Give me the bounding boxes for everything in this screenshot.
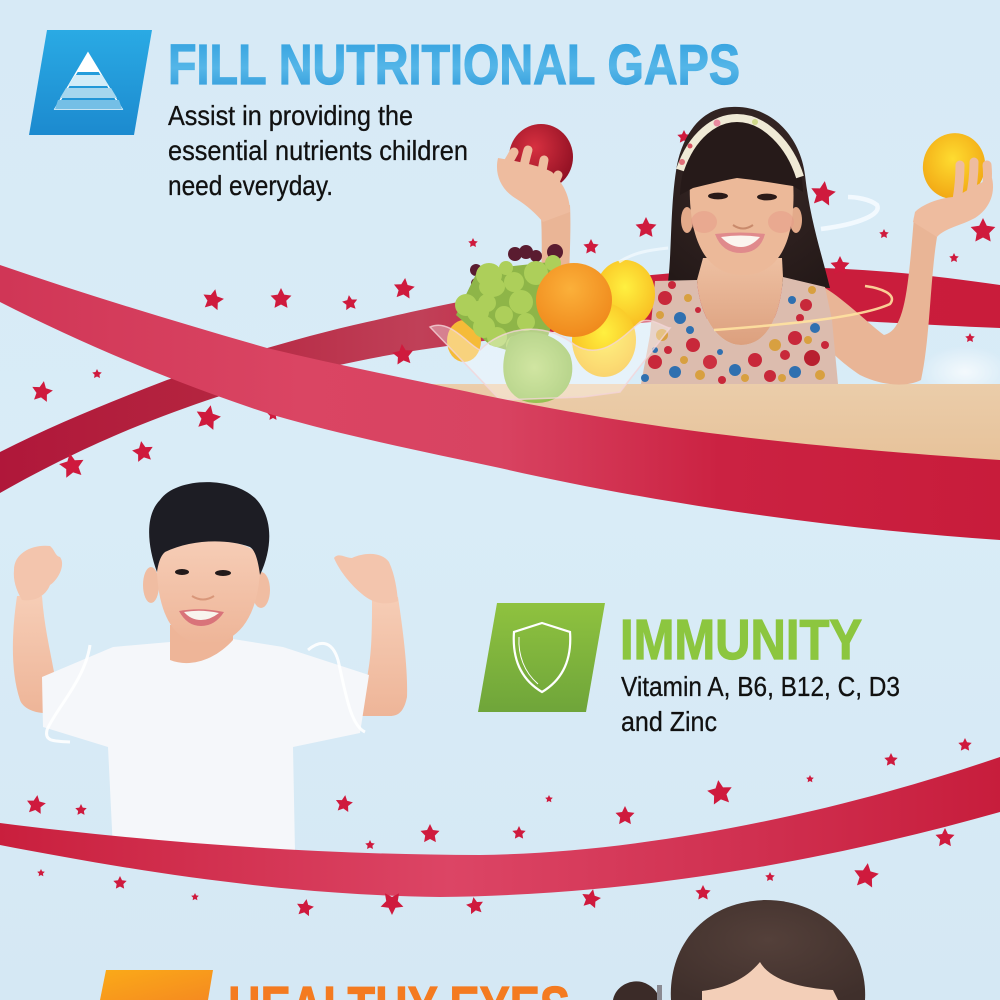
description bbox=[621, 671, 900, 737]
pigtail bbox=[613, 981, 660, 1000]
forehead bbox=[702, 962, 838, 1000]
boy hair bbox=[149, 482, 269, 575]
description: Assist in providing the bbox=[168, 100, 413, 131]
icon tile bbox=[100, 970, 213, 1000]
girl left arm bbox=[541, 205, 570, 275]
boy right arm bbox=[362, 597, 407, 716]
girl neck bbox=[697, 258, 783, 345]
table bbox=[430, 384, 1000, 470]
grapes dark bbox=[470, 244, 563, 288]
heading: immunity bbox=[478, 603, 900, 737]
boy left fist bbox=[14, 546, 62, 600]
hair bbox=[671, 900, 865, 1000]
description: and Zinc bbox=[621, 706, 717, 737]
boy neck bbox=[170, 625, 233, 663]
headband flowers bbox=[679, 119, 758, 165]
light swirl left bbox=[619, 248, 668, 262]
girl headband bbox=[680, 118, 800, 177]
girl smile bbox=[715, 232, 765, 253]
heading: healthy eyes bbox=[100, 970, 570, 1000]
green grapes bbox=[455, 255, 561, 354]
boy smile bbox=[179, 609, 224, 626]
stars upper group bbox=[30, 130, 995, 479]
right hand bbox=[913, 162, 993, 237]
boy left arm bbox=[13, 596, 54, 713]
apple bbox=[509, 124, 573, 190]
title: IMMUNITY bbox=[620, 608, 862, 672]
girl right arm bbox=[825, 217, 937, 385]
low yellow fruit bbox=[572, 303, 636, 377]
grape mass bbox=[456, 262, 560, 360]
girl with fruit bbox=[430, 107, 993, 403]
glass bowl bbox=[430, 320, 670, 400]
pear bbox=[503, 332, 572, 403]
main orange bbox=[536, 263, 612, 337]
girl cheeks bbox=[691, 211, 794, 233]
light swirl top bbox=[821, 197, 878, 229]
glowing swirl bbox=[714, 286, 892, 330]
boy eyes bbox=[175, 569, 231, 576]
description bbox=[168, 100, 468, 201]
boy ears bbox=[143, 567, 270, 608]
boy right fist bbox=[334, 554, 398, 603]
icon: food pyramid bbox=[29, 30, 152, 135]
description: need everyday. bbox=[168, 170, 333, 201]
fruit bowl and fruit bbox=[430, 244, 670, 403]
light swirl left bbox=[47, 645, 90, 742]
girl nose bbox=[733, 225, 753, 228]
girl eyes bbox=[708, 193, 777, 200]
boy face bbox=[157, 540, 260, 644]
girl ears bbox=[681, 207, 802, 233]
lemon bbox=[916, 126, 992, 206]
girl face bbox=[690, 169, 794, 275]
girl hair back bbox=[668, 107, 830, 288]
dress floral pattern bbox=[641, 281, 829, 384]
stars lower group bbox=[25, 738, 972, 917]
description: essential nutrients children bbox=[168, 135, 468, 166]
boy flexing bbox=[13, 482, 407, 852]
heading: fill nutritional gaps bbox=[29, 30, 740, 201]
boy nose bbox=[192, 596, 214, 600]
girl bangs bbox=[680, 122, 803, 195]
left yellow fruit bbox=[447, 320, 481, 362]
girl dress bbox=[641, 277, 838, 384]
back ribbon bbox=[0, 268, 1000, 493]
icon: shield bbox=[478, 603, 605, 712]
left hand bbox=[497, 150, 570, 222]
description: Vitamin A, B6, B12, C, D3 bbox=[621, 671, 900, 702]
front ribbon bbox=[0, 265, 1000, 540]
lower ribbon bbox=[0, 757, 1000, 897]
title: FILL NUTRITIONAL GAPS bbox=[168, 33, 740, 97]
girl with pigtails bbox=[613, 900, 865, 1000]
boy t-shirt bbox=[42, 639, 369, 852]
hair tie bbox=[657, 985, 662, 1000]
light swirl right bbox=[308, 643, 365, 732]
light glow beside arm bbox=[920, 346, 1000, 398]
back orange bbox=[595, 260, 655, 328]
